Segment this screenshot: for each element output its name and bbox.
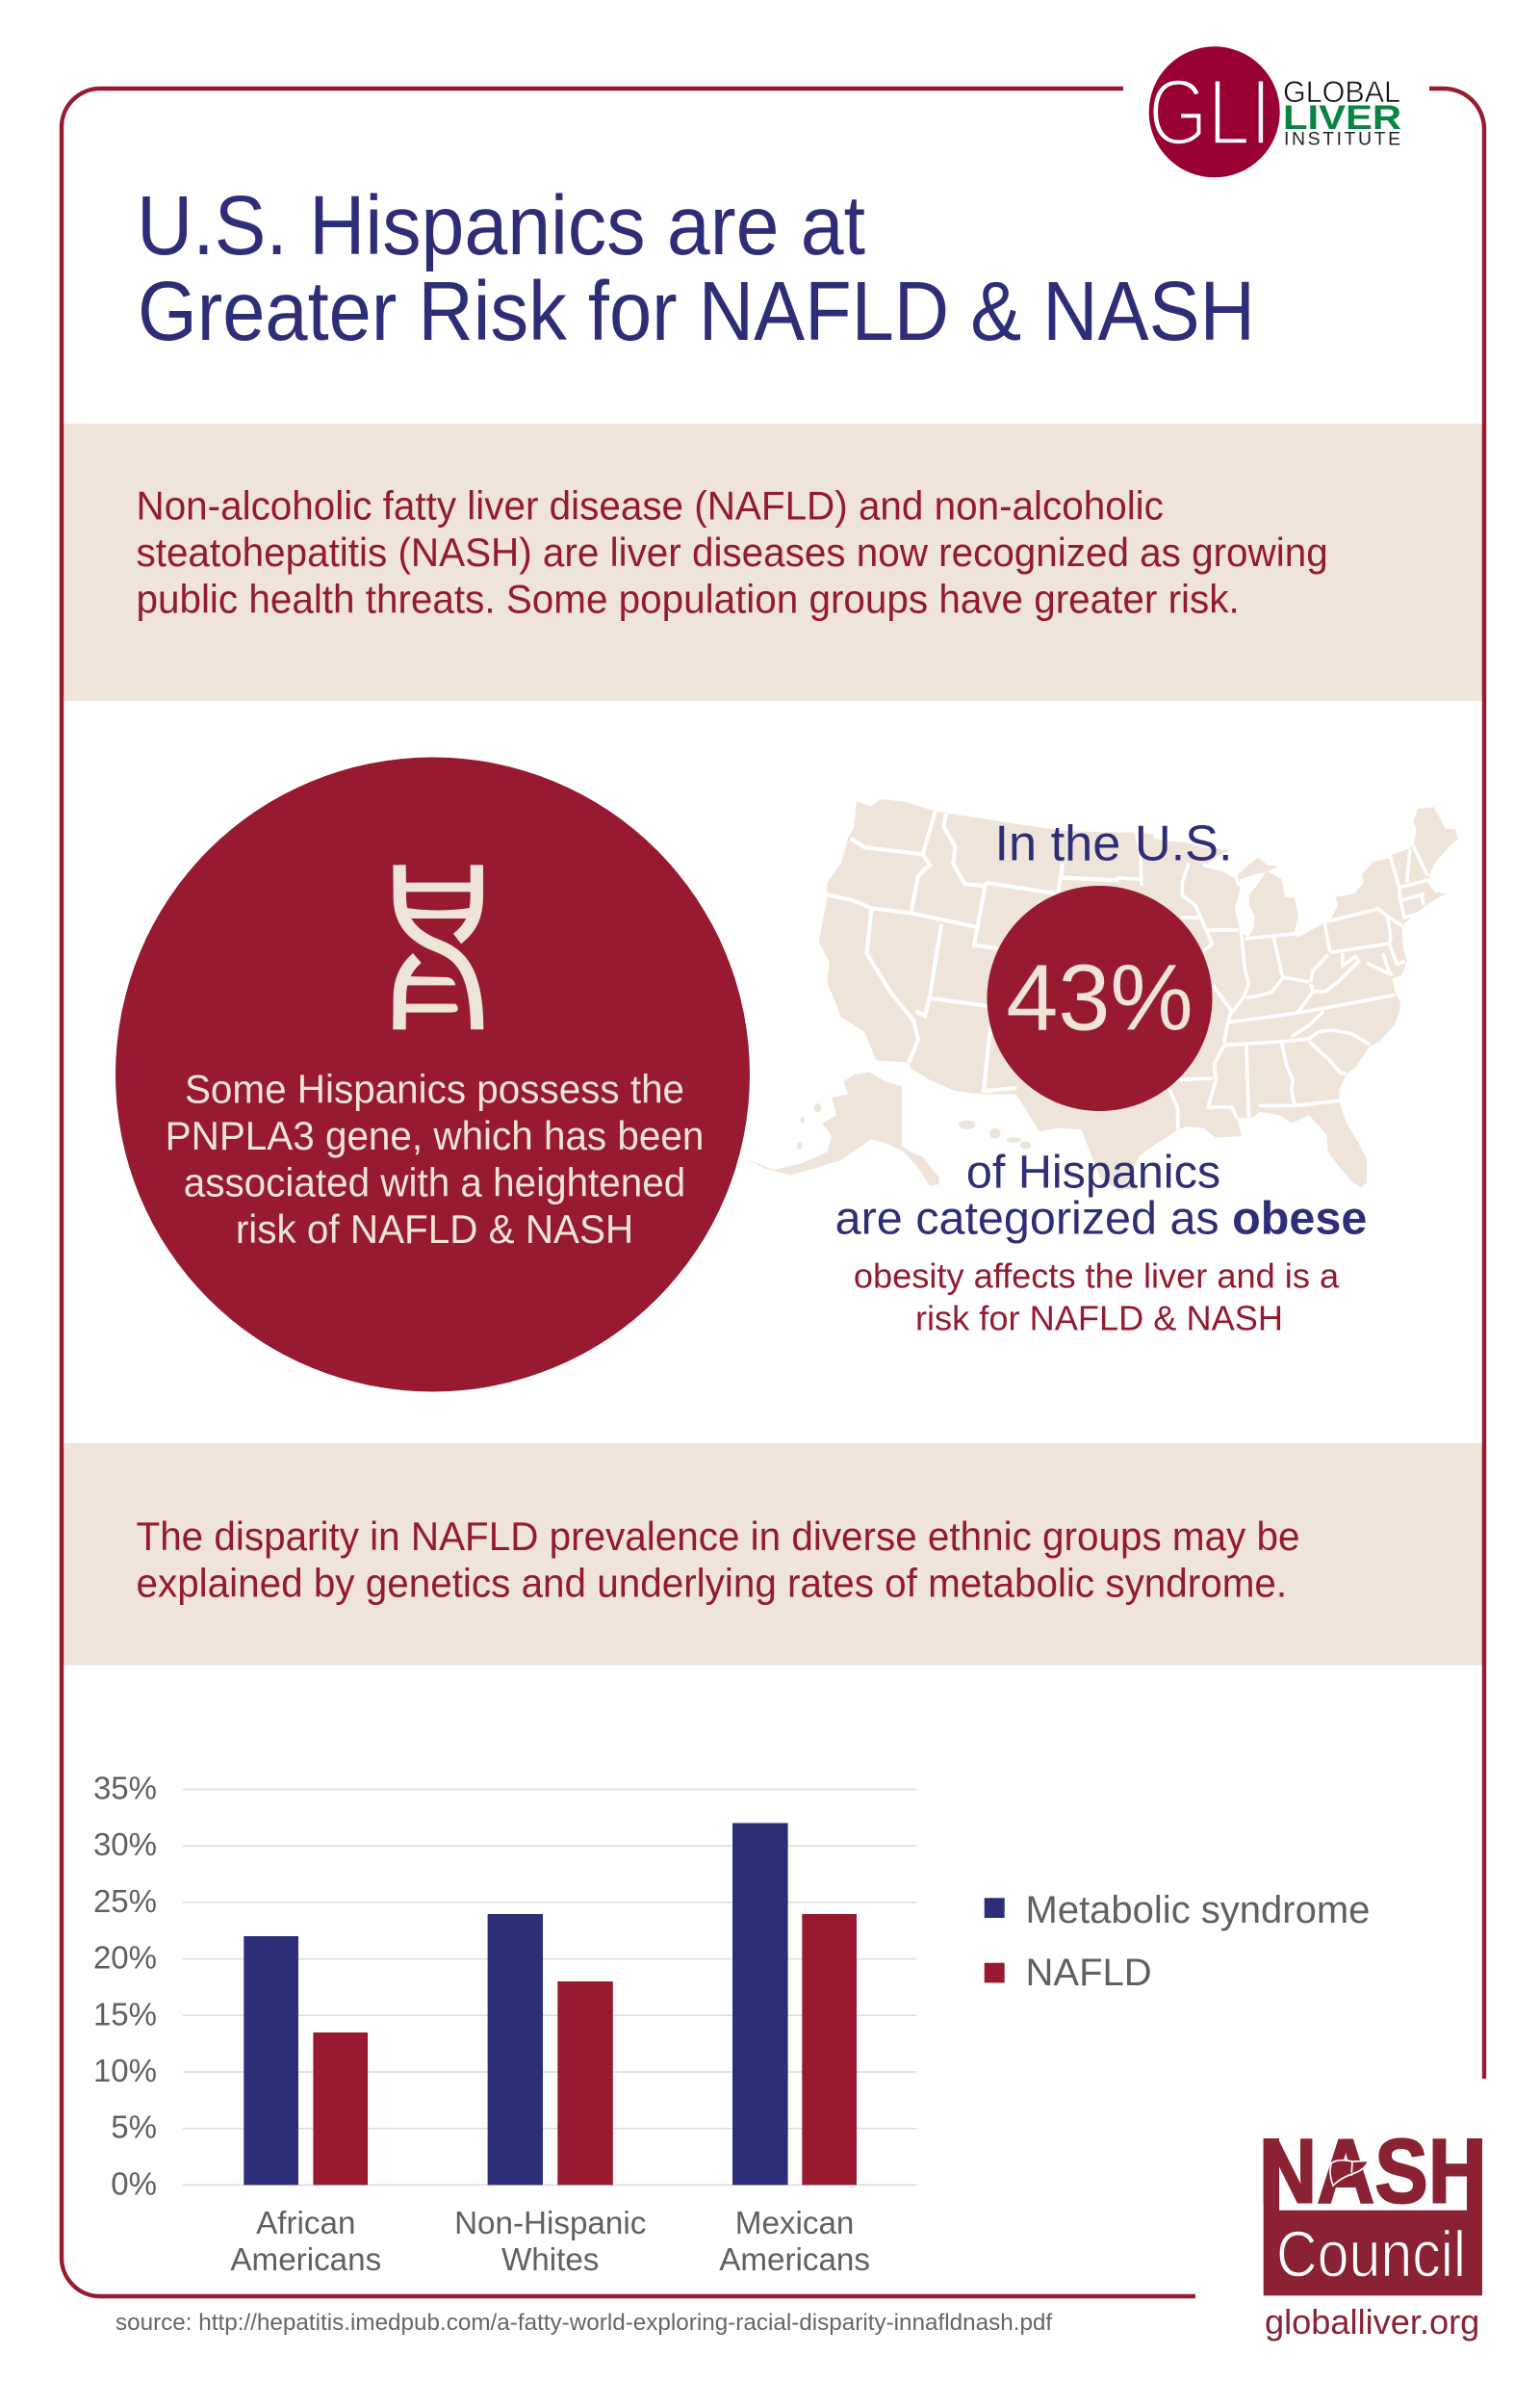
icon: DNA helix xyxy=(399,865,477,1029)
intro text: public health threats. Some population groups have greater risk. xyxy=(137,577,1240,622)
bar chart xyxy=(93,1770,916,2278)
category labels: Americans xyxy=(230,2242,381,2278)
y axis labels: 30% xyxy=(93,1826,157,1862)
y axis labels: 35% xyxy=(93,1770,157,1806)
gene circle text: Some Hispanics possess the xyxy=(185,1067,684,1112)
icon: liver xyxy=(1330,2161,1369,2186)
intro text: Non-alcoholic fatty liver disease (NAFLD) and non-alcoholic xyxy=(137,483,1164,528)
category labels: Whites xyxy=(501,2242,599,2278)
y axis labels xyxy=(93,1770,157,2201)
logo: Global Liver Institute: GLOBAL xyxy=(1283,74,1400,109)
obesity statement: of Hispanics xyxy=(966,1146,1220,1198)
logo: Global Liver Institute xyxy=(1148,46,1401,177)
title xyxy=(137,179,1255,358)
website: globalliver.org xyxy=(1265,2302,1479,2342)
category labels: Mexican xyxy=(735,2206,854,2241)
chart legend: Metabolic syndrome xyxy=(1026,1889,1370,1931)
chart legend: NAFLD xyxy=(1026,1952,1152,1994)
title: U.S. Hispanics are at xyxy=(137,179,865,272)
obesity statement: are categorized as obese xyxy=(835,1193,1367,1245)
chart legend xyxy=(985,1889,1370,1994)
y axis labels: 5% xyxy=(111,2109,157,2145)
obesity note: risk for NAFLD & NASH xyxy=(915,1298,1283,1337)
logo: Global Liver Institute: INSTITUTE xyxy=(1284,129,1400,150)
gene circle text xyxy=(166,1067,704,1252)
intro text: steatohepatitis (NASH) are liver diseases now recognized as growing xyxy=(137,530,1328,575)
callout: 43 percent circle xyxy=(988,886,1213,1111)
panel: PNPLA3 gene circle xyxy=(116,757,750,1392)
title: Greater Risk for NAFLD & NASH xyxy=(138,265,1255,358)
logo: NASH Council: Council xyxy=(1276,2217,1466,2290)
y axis labels: 0% xyxy=(111,2165,157,2201)
panel: obesity map xyxy=(746,799,1458,1337)
obesity note xyxy=(854,1256,1340,1337)
y axis labels: 15% xyxy=(93,1996,157,2032)
panel: intro band xyxy=(64,424,1482,701)
obesity note: obesity affects the liver and is a xyxy=(854,1256,1340,1296)
heading: In the U.S.: In the U.S. xyxy=(994,815,1233,871)
source line: source: http://hepatitis.imedpub.com/a-fatty-world-exploring-racial-disparity-innafldnash.pdf xyxy=(116,2310,1052,2336)
disparity text: explained by genetics and underlying rates of metabolic syndrome. xyxy=(137,1561,1287,1606)
logo: Global Liver Institute: LIVER xyxy=(1283,99,1401,137)
callout: 43 percent circle: 43% xyxy=(1006,945,1194,1049)
y axis labels: 20% xyxy=(93,1940,157,1976)
obesity statement xyxy=(835,1146,1367,1245)
category labels: Non-Hispanic xyxy=(454,2206,646,2241)
y axis labels: 10% xyxy=(93,2053,157,2088)
intro text xyxy=(137,483,1328,622)
panel: disparity band xyxy=(64,1443,1482,1666)
disparity text: The disparity in NAFLD prevalence in diverse ethnic groups may be xyxy=(137,1514,1299,1559)
logo: NASH Council xyxy=(1259,2121,1486,2295)
gene circle text: associated with a heightened xyxy=(184,1160,685,1205)
bars: African Americans xyxy=(244,1936,368,2185)
gene circle text: PNPLA3 gene, which has been xyxy=(166,1113,704,1158)
bars: Mexican Americans xyxy=(732,1824,857,2185)
category labels xyxy=(230,2206,870,2278)
category labels: Americans xyxy=(719,2242,870,2278)
disparity text xyxy=(137,1514,1299,1606)
y axis labels: 25% xyxy=(93,1883,157,1919)
gene circle text: risk of NAFLD & NASH xyxy=(236,1206,633,1252)
logo: Global Liver Institute: GLI xyxy=(1148,60,1271,165)
category labels: African xyxy=(256,2206,355,2241)
map of the United States xyxy=(746,799,1458,1191)
bars: Non-Hispanic Whites xyxy=(488,1914,613,2185)
logo: NASH Council: NASH xyxy=(1259,2121,1486,2223)
